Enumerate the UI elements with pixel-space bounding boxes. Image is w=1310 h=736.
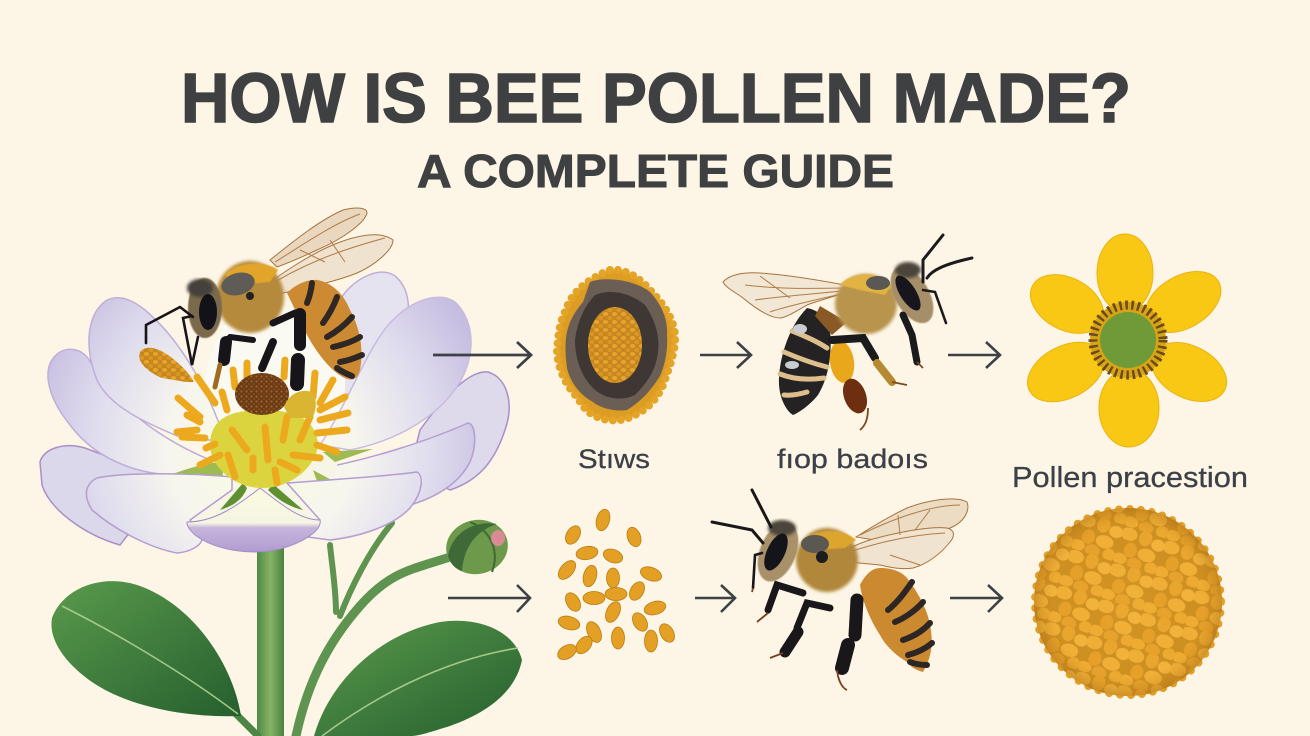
pollen sac (827, 340, 857, 384)
green bases (220, 483, 303, 510)
arrow 1 top (433, 342, 531, 368)
large flower (40, 272, 509, 553)
head (750, 517, 806, 587)
thorax (216, 261, 284, 333)
legs and antennae (146, 307, 300, 384)
subtitle: A COMPLETE GUIDE (417, 145, 894, 197)
abdomen (287, 280, 362, 379)
anther core (235, 373, 289, 415)
upper left petal (89, 298, 225, 440)
green petal bases (163, 449, 373, 484)
flower bud (441, 514, 513, 580)
anther club (139, 348, 194, 382)
arrow 3 top (948, 342, 1000, 368)
label: fiop badoys: fıop badoıs (777, 444, 928, 474)
pollen ball (1034, 508, 1222, 696)
stamens (177, 360, 348, 483)
arrow 2 bottom (695, 585, 735, 612)
bee bottom centre (712, 490, 968, 690)
abdomen (860, 568, 932, 672)
yellow flower (1018, 234, 1236, 447)
thorax (796, 528, 858, 592)
legs and antennae (712, 490, 857, 668)
wing (723, 273, 860, 318)
abdomen (779, 308, 831, 415)
front left petal (86, 474, 232, 553)
legs and antennae (832, 235, 972, 362)
bottom centre petal (187, 488, 320, 552)
thorax (835, 274, 897, 334)
wings (270, 208, 367, 267)
right leaf (314, 621, 522, 736)
label: stiws: Stıws (578, 444, 650, 474)
pollen pocket (557, 270, 675, 420)
head (882, 260, 942, 330)
label: pollen pracestion: Pollen pracestion (1012, 462, 1248, 494)
front right petal (287, 472, 421, 540)
plant stems (232, 523, 450, 736)
title: HOW IS BEE POLLEN MADE? (181, 59, 1131, 137)
arrow 2 top (700, 342, 751, 368)
right lower petal (312, 423, 475, 506)
bee on flower (146, 208, 393, 418)
head (188, 278, 222, 338)
flower centre (210, 410, 318, 488)
left leaf (51, 581, 241, 716)
arrow 3 bottom (950, 585, 1002, 612)
petal underlay (185, 450, 340, 530)
back petals (340, 272, 409, 400)
petals (1018, 234, 1236, 447)
bee top centre (723, 235, 972, 430)
arrow 1 bottom (448, 585, 530, 612)
big right petal (320, 297, 471, 450)
wings (856, 499, 968, 542)
pollen grains (555, 508, 678, 663)
left petal (48, 349, 215, 475)
pollen load (588, 307, 642, 383)
flower eye (1090, 302, 1166, 378)
